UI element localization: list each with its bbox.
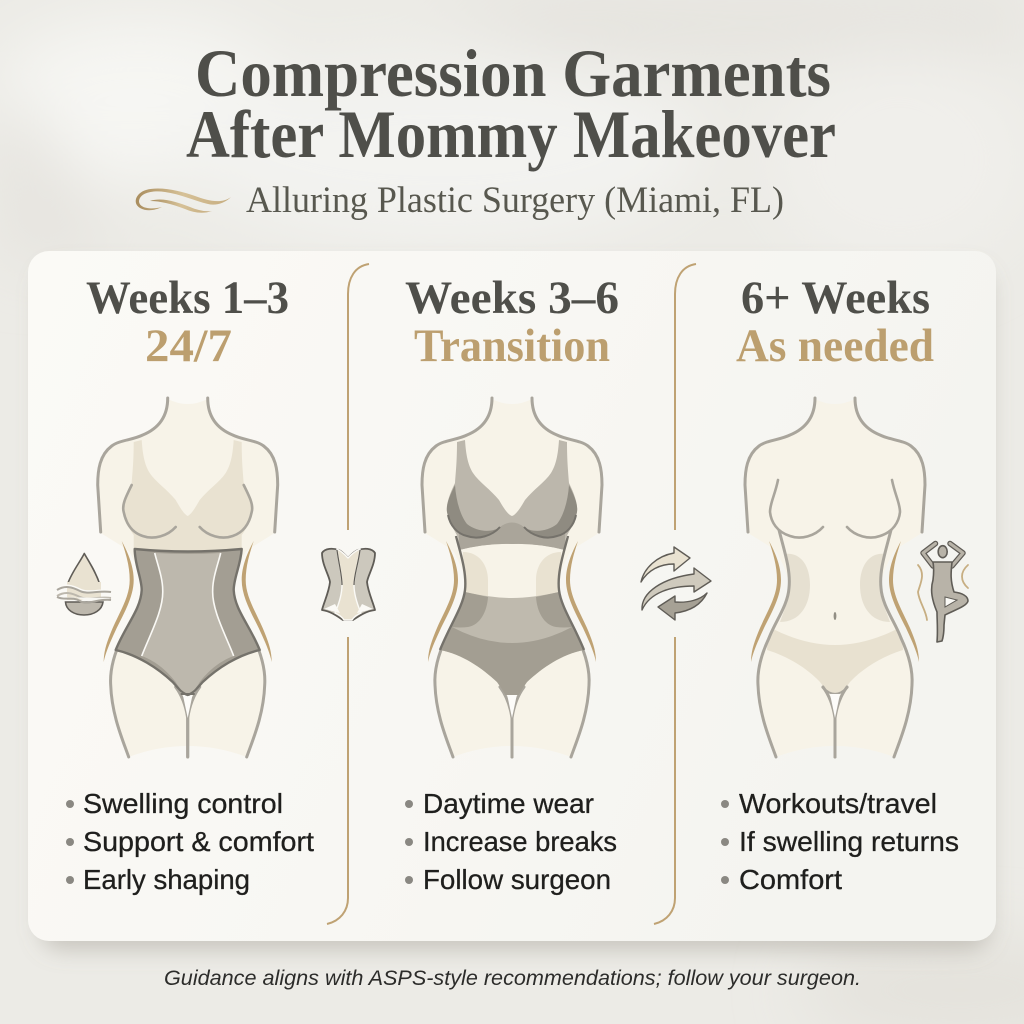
side swelling zones (780, 554, 810, 622)
high-waist shorts (440, 592, 584, 695)
column 3 list: Workouts/travel (739, 788, 937, 819)
icon: yoga figure (918, 544, 968, 642)
title (186, 35, 836, 172)
title: After Mommy Makeover (186, 96, 836, 172)
divider 2 (654, 264, 696, 924)
column 1 heading (86, 272, 289, 372)
figure: unclothed body, as-needed stage (745, 398, 925, 757)
divider 1 (327, 264, 369, 924)
column 1 heading: 24/7 (145, 320, 232, 372)
column 3 list (721, 788, 959, 895)
bra cups (447, 485, 500, 538)
column 2 list: Increase breaks (423, 826, 617, 857)
high-waist shaper (116, 549, 260, 695)
column 1 list: Early shaping (83, 864, 250, 895)
column 2 heading: Weeks 3–6 (405, 272, 619, 324)
decorative flourish (136, 189, 231, 213)
subtitle: Alluring Plastic Surgery (Miami, FL) (246, 180, 784, 221)
column 1 list: Swelling control (83, 788, 283, 819)
column 1 list (66, 788, 314, 895)
icon: cycling arrows (641, 547, 711, 620)
column 2 list: Daytime wear (423, 788, 594, 819)
column 1 heading: Weeks 1–3 (86, 272, 289, 324)
icon: corset (322, 549, 375, 620)
icon: water drop with waves (57, 554, 111, 615)
column 3 list: If swelling returns (739, 826, 959, 857)
column 2 list (405, 788, 617, 895)
figure: body in 24/7 compression garment (98, 398, 278, 757)
footer note: Guidance aligns with ASPS-style recommendations; follow your surgeon. (164, 967, 861, 990)
column 2 heading: Transition (414, 320, 610, 372)
figure: body in transition garment (422, 398, 602, 757)
side panels (463, 552, 488, 597)
column 3 list: Comfort (739, 864, 842, 895)
title: Compression Garments (195, 35, 831, 111)
navel (834, 612, 836, 620)
column 1 list: Support & comfort (83, 826, 314, 857)
bra (447, 440, 577, 550)
light brief (767, 629, 903, 694)
garment side edges (440, 536, 584, 650)
column 3 heading: As needed (736, 320, 934, 372)
panel: timeline card (28, 251, 996, 941)
card shadow (40, 268, 990, 950)
column 2 list: Follow surgeon (423, 864, 611, 895)
column 3 heading (736, 272, 934, 372)
bra band (459, 522, 565, 550)
column 2 heading (405, 272, 619, 372)
bra (123, 440, 252, 552)
column 3 heading: 6+ Weeks (741, 272, 930, 324)
